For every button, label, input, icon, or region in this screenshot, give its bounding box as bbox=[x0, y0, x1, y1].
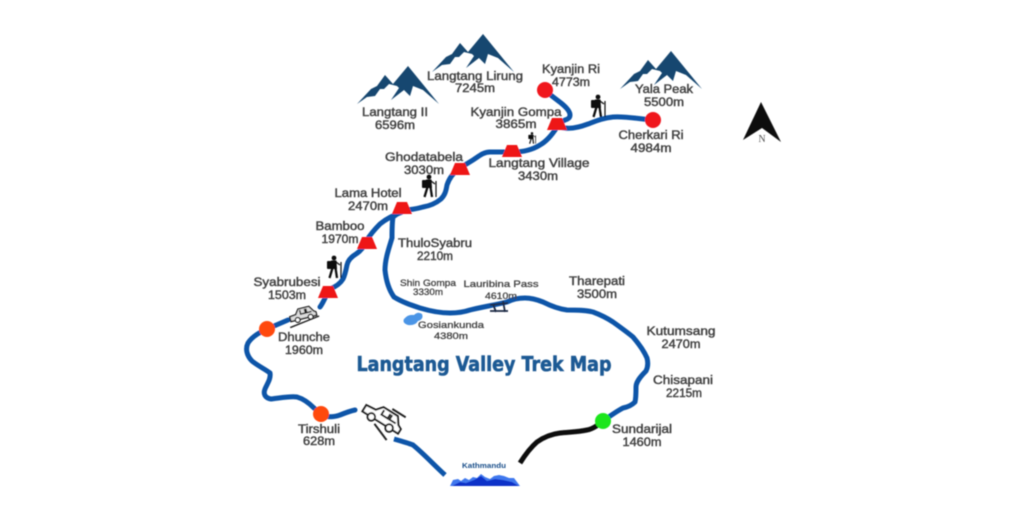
marker: Tirshuli bbox=[313, 406, 329, 422]
label: Langtang Village altitude: 3430m bbox=[518, 171, 558, 183]
marker: Dhunche bbox=[259, 321, 275, 337]
route: lower trail to Syabrubesi bbox=[320, 212, 402, 307]
label: Kathmandu: Kathmandu bbox=[462, 461, 506, 470]
label: Bamboo altitude: 1970m bbox=[322, 234, 358, 246]
tent: Ghodatabela bbox=[450, 163, 470, 175]
mountain: Yala Peak bbox=[620, 51, 702, 89]
route: road to Kathmandu bbox=[394, 439, 445, 475]
label: Kutumsang altitude: 2470m bbox=[662, 339, 700, 351]
route: upper valley trail bbox=[403, 117, 653, 210]
marker: Cherkari Ri bbox=[645, 112, 661, 128]
label: Dhunche altitude: 1960m bbox=[285, 345, 323, 357]
label: Shin Gompa altitude: 3330m bbox=[413, 287, 443, 298]
label: Kyanjin Ri: Kyanjin Ri bbox=[542, 64, 600, 76]
route: black road from Kathmandu to Sundarijal bbox=[520, 421, 603, 463]
tent: Syabrubesi bbox=[318, 286, 338, 298]
icon: hiker near Yala Peak bbox=[591, 95, 605, 117]
tent: Bamboo bbox=[357, 237, 377, 249]
tent: Lama Hotel bbox=[392, 202, 412, 214]
label: Tharepati altitude: 3500m bbox=[577, 289, 617, 301]
route: Syabrubesi to Tirshuli bbox=[247, 320, 355, 417]
label: Kyanjin Gompa altitude: 3865m bbox=[496, 119, 536, 131]
label: Kyanjin Gompa: Kyanjin Gompa bbox=[470, 107, 562, 119]
label: ThuloSyabru altitude: 2210m bbox=[417, 251, 453, 263]
label: Chisapani altitude: 2215m bbox=[666, 388, 702, 400]
label: Langtang II altitude: 6596m bbox=[375, 120, 415, 132]
label: Tharepati: Tharepati bbox=[569, 276, 625, 288]
label: Ghodatabela altitude: 3030m bbox=[404, 165, 444, 177]
label: Lama Hotel altitude: 2470m bbox=[348, 201, 388, 213]
label: Cherkari Ri altitude: 4984m bbox=[630, 143, 672, 155]
title: Langtang Valley Trek Map bbox=[356, 352, 612, 376]
label: Gosiankunda: Gosiankunda bbox=[418, 320, 485, 331]
label: Langtang II: Langtang II bbox=[362, 107, 428, 119]
label: Chisapani: Chisapani bbox=[653, 375, 713, 387]
icon: jeep near Tirshuli bbox=[356, 396, 407, 443]
marker: Sundarijal bbox=[595, 413, 611, 429]
label: Gosiankunda altitude: 4380m bbox=[434, 331, 468, 342]
north arrow bbox=[743, 102, 781, 145]
label: Langtang Lirung altitude: 7245m bbox=[455, 83, 495, 95]
icon: hiker near Ghodatabela bbox=[422, 175, 436, 197]
label: ThuloSyabru: ThuloSyabru bbox=[398, 238, 472, 250]
icon: hiker near Bamboo bbox=[327, 256, 341, 278]
label: Cherkari Ri: Cherkari Ri bbox=[618, 130, 684, 142]
label: Yala Peak altitude: 5500m bbox=[644, 97, 684, 109]
marker: Kyanjin Ri bbox=[537, 82, 553, 98]
label: Tirshuli altitude: 628m bbox=[303, 436, 335, 448]
label: Tirshuli: Tirshuli bbox=[298, 424, 340, 436]
north arrow: N bbox=[758, 134, 766, 145]
icon: Lauribina Pass crossing bbox=[490, 301, 508, 312]
icon: small car near Dhunche bbox=[286, 304, 320, 328]
label: Shin Gompa: Shin Gompa bbox=[400, 278, 457, 289]
label: Lauribina Pass altitude: 4610m bbox=[485, 291, 517, 302]
label: Lama Hotel: Lama Hotel bbox=[334, 188, 402, 200]
route: Helambu trail bbox=[385, 212, 648, 421]
label: Syabrubesi altitude: 1503m bbox=[268, 290, 306, 302]
label: Syabrubesi: Syabrubesi bbox=[254, 277, 320, 289]
label: Sundarijal: Sundarijal bbox=[612, 424, 672, 436]
icon: Gosiankunda lake bbox=[404, 313, 422, 325]
label: Kutumsang: Kutumsang bbox=[646, 326, 716, 338]
label: Bamboo: Bamboo bbox=[316, 221, 364, 233]
label: Langtang Lirung: Langtang Lirung bbox=[427, 71, 523, 83]
icon: small hiker near Langtang Village bbox=[528, 132, 536, 144]
mountain: Langtang Lirung bbox=[432, 34, 514, 72]
mountain: Langtang II bbox=[357, 66, 439, 104]
label: Ghodatabela: Ghodatabela bbox=[385, 152, 464, 164]
label: Dhunche: Dhunche bbox=[278, 332, 330, 344]
tent: Langtang Village bbox=[502, 145, 522, 157]
label: Kyanjin Ri altitude: 4773m bbox=[552, 77, 590, 89]
label: Sundarijal altitude: 1460m bbox=[622, 437, 662, 449]
tent: Kyanjin Gompa bbox=[547, 118, 567, 130]
route: Kyanjin Ri spur bbox=[545, 90, 570, 124]
label: Lauribina Pass: Lauribina Pass bbox=[464, 279, 539, 290]
icon: Kathmandu skyline bbox=[450, 474, 520, 486]
label: Yala Peak: Yala Peak bbox=[635, 84, 693, 96]
label: Langtang Village: Langtang Village bbox=[488, 158, 590, 170]
